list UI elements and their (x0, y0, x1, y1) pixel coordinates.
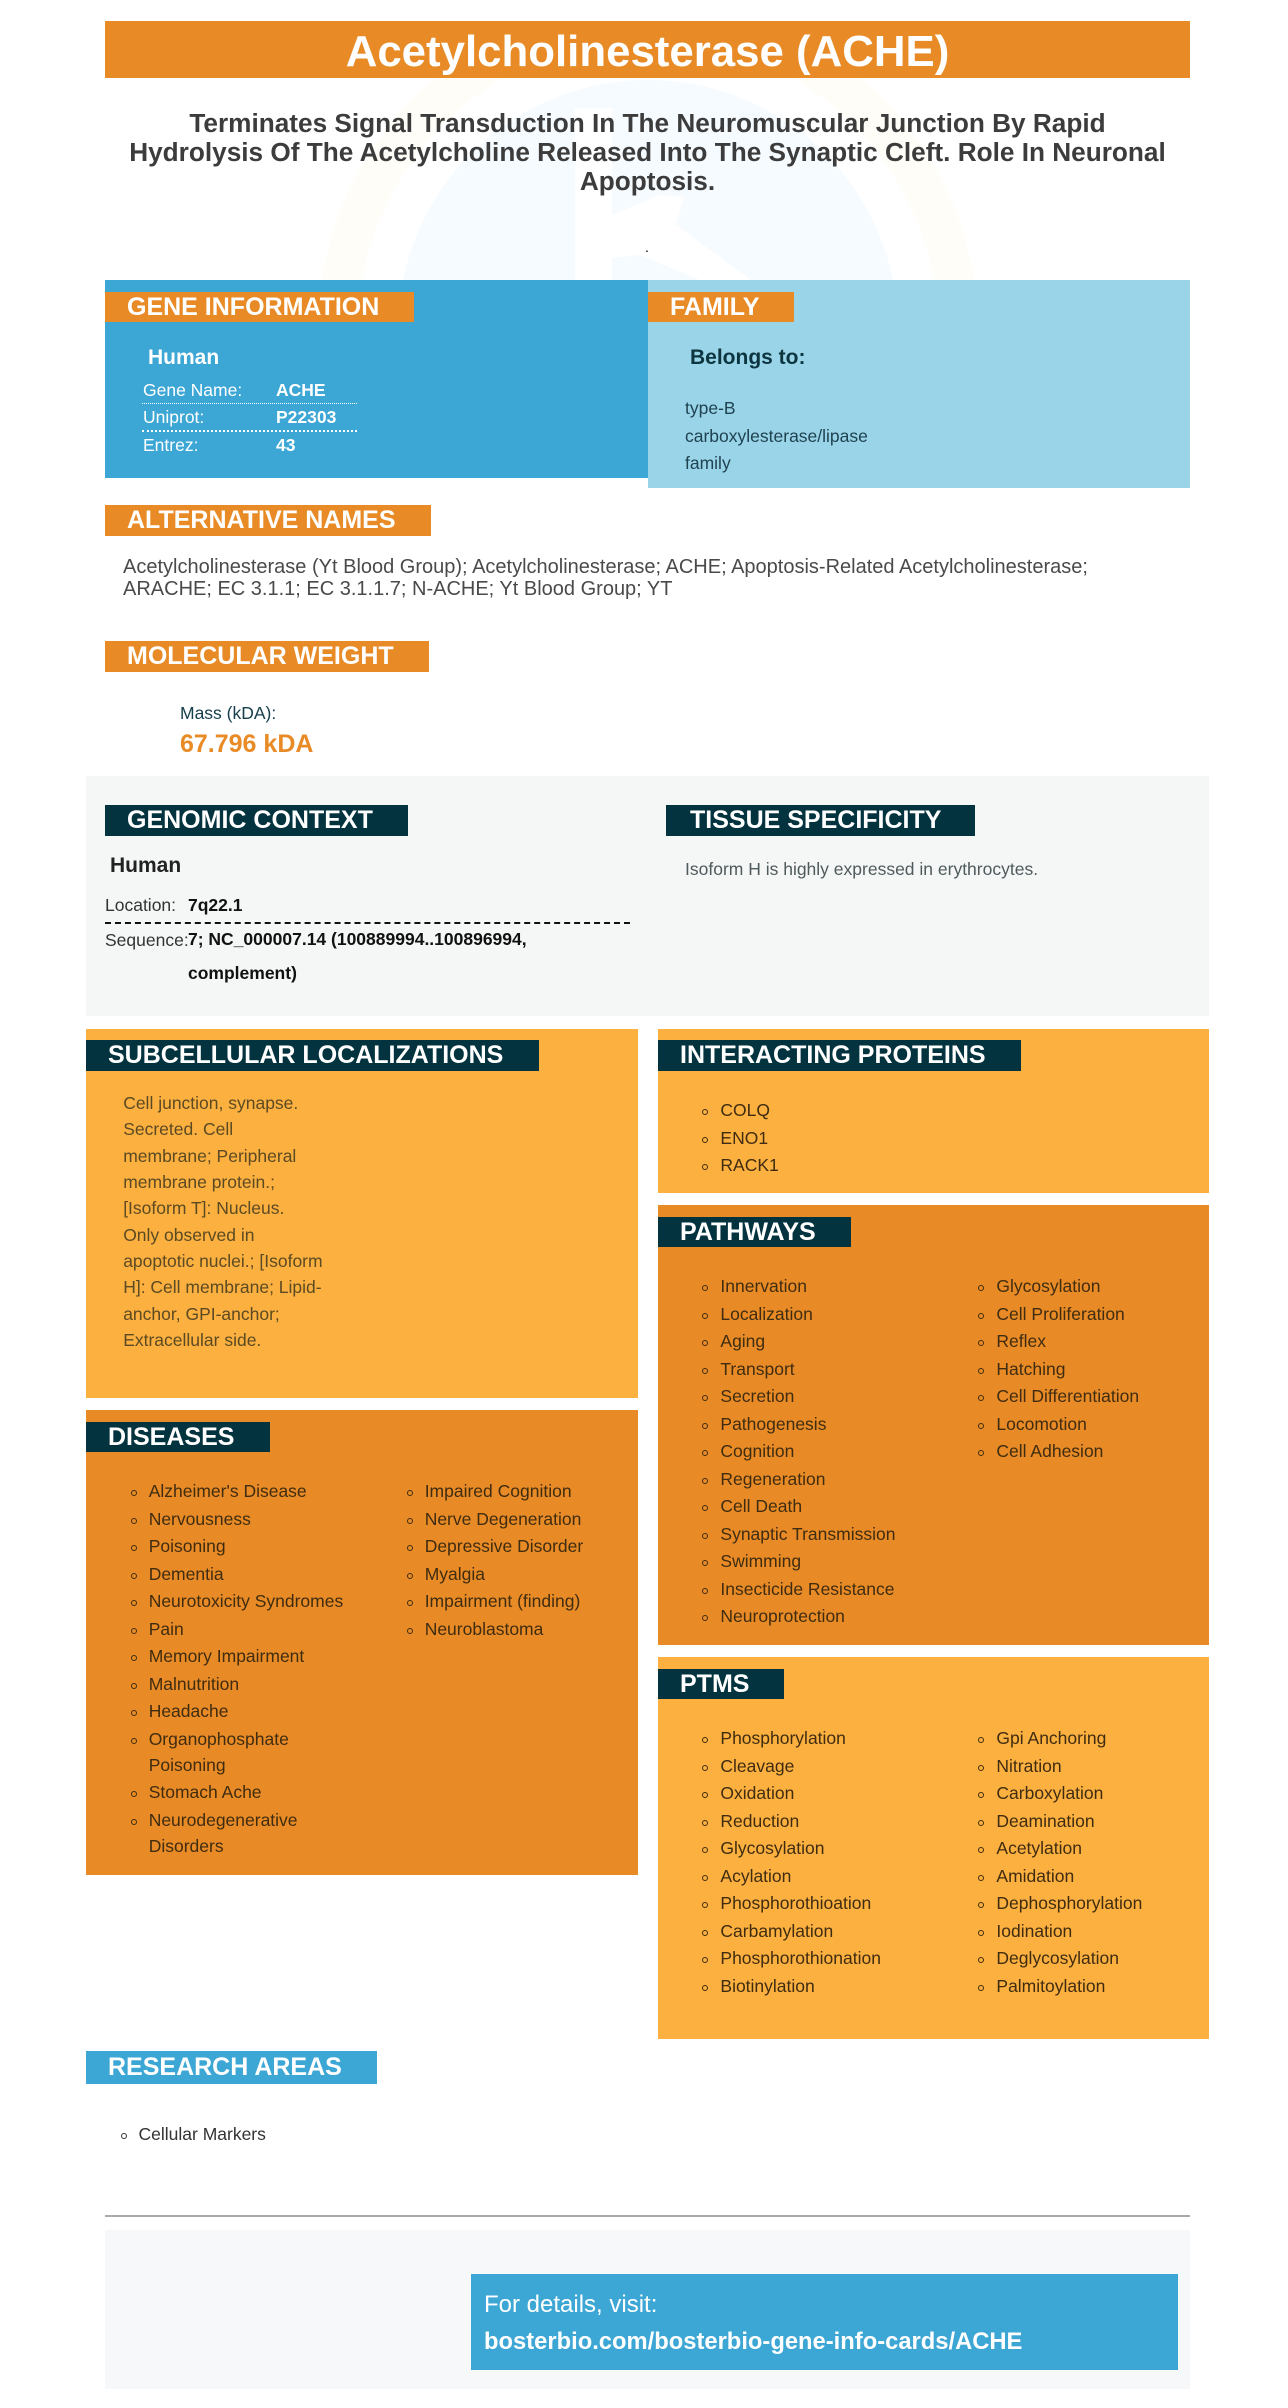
list: ptms column 2 (978, 1728, 1142, 1996)
heading: pathways: PATHWAYS (680, 1218, 816, 1246)
list: pathways column 2: Cell Differentiation (996, 1386, 1139, 1406)
watermark logo (404, 80, 892, 280)
panel: genomic context and tissue specificity (86, 776, 1209, 1016)
list: ptms column 1: Oxidation (720, 1783, 794, 1803)
list: pathways column 1: Insecticide Resistance (720, 1578, 895, 1598)
alternative names text: Acetylcholinesterase (Yt Blood Group); Acetylcholinesterase; ACHE; Apoptosis-Related Acetylcholinesterase; (123, 556, 1088, 578)
panel: gene information (105, 280, 648, 478)
panel: pathways (658, 1205, 1209, 1645)
panel: subcellular localizations (86, 1029, 638, 1398)
list: diseases column 1: Dementia (149, 1564, 224, 1584)
list: pathways column 1 (702, 1276, 895, 1626)
list: pathways column 1: Transport (720, 1358, 795, 1378)
list: research areas: Cellular Markers (138, 2124, 266, 2144)
location label: Location: (105, 895, 176, 915)
family text (685, 398, 868, 473)
list: ptms column 2: Amidation (996, 1866, 1074, 1886)
list: pathways column 1: Secretion (720, 1386, 794, 1406)
sequence value: complement) (188, 962, 297, 982)
list: diseases column 1: Stomach Ache (149, 1782, 262, 1802)
list: diseases column 1: Memory Impairment (149, 1646, 304, 1666)
list: ptms column 1: Phosphorylation (720, 1728, 846, 1748)
list: pathways column 2: Cell Proliferation (996, 1304, 1125, 1324)
list: pathways column 2: Reflex (996, 1331, 1046, 1351)
panel: alternative names (105, 505, 1088, 600)
heading: diseases (86, 1422, 270, 1452)
entrez row: Entrez: (143, 435, 198, 455)
list: ptms column 1 (702, 1728, 881, 1996)
alternative names text: ARACHE; EC 3.1.1; EC 3.1.1.7; N-ACHE; Yt Blood Group; YT (123, 578, 672, 600)
localization text: H]: Cell membrane; Lipid- (123, 1277, 322, 1297)
panel: diseases (86, 1410, 638, 1875)
tissue specificity text: Isoform H is highly expressed in erythrocytes. (685, 859, 1038, 879)
sequence value (188, 929, 527, 982)
heading: interacting proteins: INTERACTING PROTEINS (680, 1041, 986, 1069)
list: ptms column 2: Palmitoylation (996, 1976, 1105, 1996)
heading: subcellular localizations: SUBCELLULAR LOCALIZATIONS (108, 1041, 503, 1069)
list: diseases column 1: Headache (149, 1701, 228, 1721)
localization text: Cell junction, synapse. (123, 1093, 298, 1113)
gene name row: Gene Name: (143, 380, 242, 400)
list: diseases column 2: Impairment (finding) (425, 1591, 580, 1611)
list: ptms column 2: Acetylation (996, 1838, 1082, 1858)
list: pathways column 1: Pathogenesis (720, 1414, 826, 1434)
list: ptms column 2: Dephosphorylation (996, 1893, 1142, 1913)
list: diseases column 1: Organophosphate (149, 1728, 289, 1748)
list: diseases column 2: Impaired Cognition (425, 1481, 572, 1501)
list: pathways column 2: Locomotion (996, 1414, 1087, 1434)
list: pathways column 1: Neuroprotection (720, 1606, 845, 1626)
list: ptms column 1: Reduction (720, 1810, 799, 1830)
heading: ptms: PTMS (680, 1670, 749, 1698)
list: diseases column 1: Malnutrition (149, 1674, 239, 1694)
localization text: membrane; Peripheral (123, 1146, 296, 1166)
list: diseases column 2: Neuroblastoma (425, 1618, 543, 1638)
title: Acetylcholinesterase (ACHE) (346, 27, 949, 76)
list: pathways column 2 (978, 1276, 1139, 1461)
species label: Human (110, 854, 181, 877)
subtitle: Hydrolysis Of The Acetylcholine Released Into The Synaptic Cleft. Role In Neuronal (129, 136, 1166, 166)
belongs to label: Belongs to: (690, 346, 806, 369)
heading: alternative names: ALTERNATIVE NAMES (127, 506, 396, 534)
panel: research areas (86, 2051, 377, 2144)
localization text: membrane protein.; (123, 1172, 275, 1192)
panel: family (648, 280, 1190, 488)
subtitle: Terminates Signal Transduction In The Neuromuscular Junction By Rapid (189, 108, 1106, 138)
list: diseases column 2: Myalgia (425, 1564, 485, 1584)
list: ptms column 1: Carbamylation (720, 1920, 833, 1940)
localization text: Only observed in (123, 1225, 255, 1245)
mass value: 67.796 kDA (180, 730, 313, 758)
mass label: Mass (kDA): (180, 703, 276, 723)
subtitle (129, 108, 1166, 196)
list: ptms column 2: Deamination (996, 1810, 1095, 1830)
heading: pathways (658, 1217, 851, 1247)
list: diseases column 1: Neurodegenerative (149, 1810, 298, 1830)
list: ptms column 2: Iodination (996, 1920, 1072, 1940)
alternative names text (123, 556, 1088, 600)
family text: type-B (685, 398, 736, 418)
sequence label: Sequence: (105, 930, 189, 950)
species label: Human (148, 346, 219, 369)
list: diseases column 2: Nerve Degeneration (425, 1508, 581, 1528)
heading: family (648, 292, 794, 322)
family text: carboxylesterase/lipase (685, 426, 868, 446)
list: diseases column 1: Disorders (149, 1836, 224, 1856)
list: pathways column 1: Cognition (720, 1441, 794, 1461)
list: pathways column 2: Glycosylation (996, 1276, 1100, 1296)
list: ptms column 1: Glycosylation (720, 1838, 824, 1858)
sequence value: 7; NC_000007.14 (100889994..100896994, (188, 929, 527, 949)
list: pathways column 1: Regeneration (720, 1468, 825, 1488)
list: ptms column 1: Biotinylation (720, 1976, 815, 1996)
list: pathways column 1: Cell Death (720, 1496, 802, 1516)
heading: molecular weight: MOLECULAR WEIGHT (127, 642, 394, 670)
list: ptms column 1: Phosphorothionation (720, 1948, 881, 1968)
list: pathways column 1: Innervation (720, 1276, 807, 1296)
localization text: apoptotic nuclei.; [Isoform (123, 1251, 323, 1271)
panel: ptms (658, 1657, 1209, 2039)
panel: interacting proteins (658, 1029, 1209, 1193)
list: ptms column 2: Nitration (996, 1756, 1062, 1776)
list: pathways column 2: Cell Adhesion (996, 1441, 1103, 1461)
list: pathways column 1: Aging (720, 1331, 765, 1351)
heading: genomic context: GENOMIC CONTEXT (127, 806, 373, 834)
localization text: Secreted. Cell (123, 1119, 233, 1139)
list: diseases column 1: Nervousness (149, 1508, 251, 1528)
list: diseases column 1: Poisoning (149, 1536, 226, 1556)
localization text (123, 1093, 323, 1350)
list: diseases column 1: Alzheimer's Disease (149, 1481, 307, 1501)
callout: details link (471, 2274, 1178, 2370)
list: diseases column 1: Pain (149, 1618, 184, 1638)
list: diseases column 1: Poisoning (149, 1754, 226, 1774)
list: ptms column 2: Deglycosylation (996, 1948, 1119, 1968)
list: pathways column 1: Swimming (720, 1551, 801, 1571)
list: ptms column 2: Gpi Anchoring (996, 1728, 1106, 1748)
heading: ptms (658, 1669, 784, 1699)
list: diseases column 2: Depressive Disorder (425, 1536, 583, 1556)
callout label: For details, visit: (484, 2290, 657, 2318)
heading: family: FAMILY (670, 293, 759, 321)
list: ptms column 1: Phosphorothioation (720, 1893, 871, 1913)
list: pathways column 1: Localization (720, 1304, 813, 1324)
heading: research areas (86, 2051, 377, 2084)
list: ptms column 2: Carboxylation (996, 1783, 1103, 1803)
title (105, 21, 1190, 78)
entrez value: 43 (276, 435, 295, 455)
callout url: bosterbio.com/bosterbio-gene-info-cards/ACHE (484, 2328, 1022, 2354)
uniprot value: P22303 (276, 407, 336, 427)
list: ptms column 1: Acylation (720, 1866, 791, 1886)
heading: tissue specificity: TISSUE SPECIFICITY (690, 806, 941, 834)
localization text: [Isoform T]: Nucleus. (123, 1198, 284, 1218)
list: diseases column 1 (131, 1481, 343, 1856)
uniprot row: Uniprot: (143, 407, 204, 427)
panel: footer (105, 2230, 1190, 2389)
list: interacting proteins: ENO1 (720, 1128, 768, 1148)
heading: research areas: RESEARCH AREAS (108, 2053, 342, 2081)
list: ptms column 1: Cleavage (720, 1756, 794, 1776)
gene name value: ACHE (276, 380, 326, 400)
family text: family (685, 453, 731, 473)
localization text: anchor, GPI-anchor; (123, 1304, 280, 1324)
subtitle: Apoptosis. (580, 166, 715, 196)
heading: gene information: GENE INFORMATION (127, 293, 379, 321)
small dot: . (645, 239, 649, 255)
localization text: Extracellular side. (123, 1330, 261, 1350)
list: interacting proteins (702, 1100, 779, 1175)
list: diseases column 1: Neurotoxicity Syndromes (149, 1591, 343, 1611)
list: interacting proteins: RACK1 (720, 1155, 779, 1175)
list: interacting proteins: COLQ (720, 1100, 770, 1120)
list: pathways column 2: Hatching (996, 1358, 1065, 1378)
panel: molecular weight (105, 641, 429, 758)
list: diseases column 2 (407, 1481, 583, 1638)
location value: 7q22.1 (188, 895, 242, 915)
heading: diseases: DISEASES (108, 1423, 234, 1451)
list: pathways column 1: Synaptic Transmission (720, 1524, 895, 1544)
